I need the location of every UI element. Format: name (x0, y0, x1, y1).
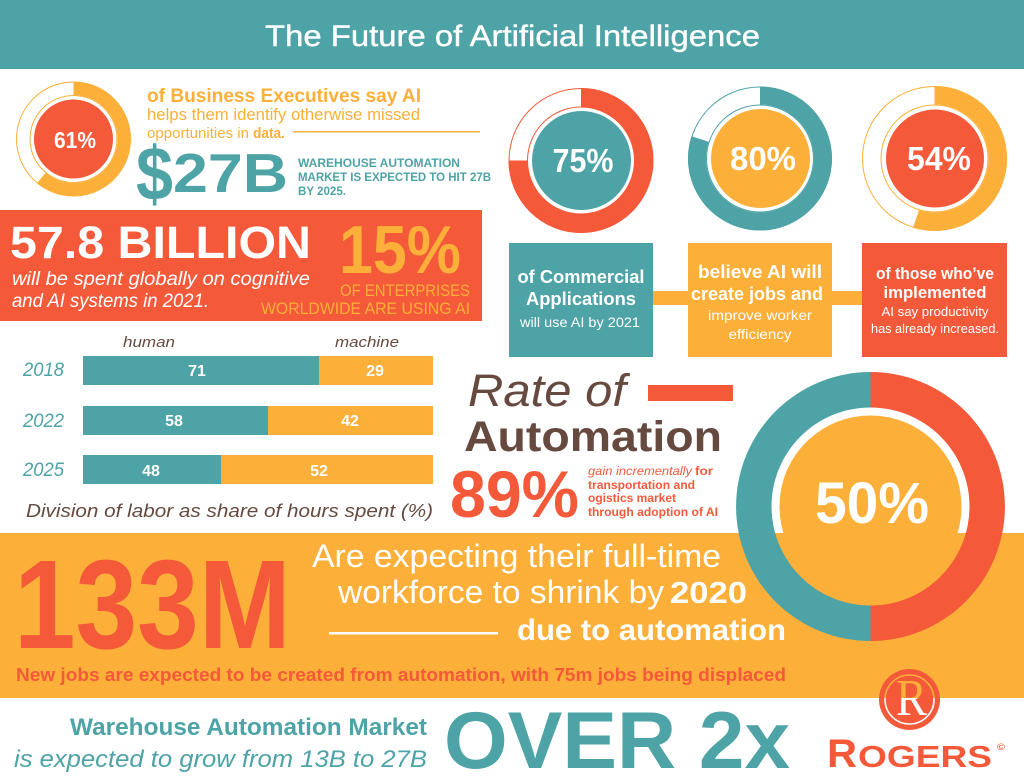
bar row: 2022: 42 (341, 413, 359, 430)
panel: create jobs: believe AI will (698, 262, 822, 282)
stat: 89%: 89% (450, 457, 579, 531)
panel: commercial applications: of Commercial (518, 267, 644, 287)
text: warehouse automation market growth (14, 714, 427, 773)
panel: create jobs: efficiency (728, 326, 792, 342)
panel: commercial applications (509, 243, 653, 357)
text: business executives: of Business Executives say AI (147, 86, 421, 107)
panel: productivity: implemented (884, 284, 986, 302)
panel: create jobs: create jobs and (691, 284, 823, 304)
legend labels (123, 334, 399, 351)
bar row: 2025: 52 (310, 463, 328, 480)
donut chart: 54% (862, 86, 1007, 231)
legend labels: human (123, 334, 175, 351)
bar row: 2018: 71 (188, 363, 206, 380)
text: business executives: opportunities in (147, 125, 249, 142)
text: enterprises using AI: OF ENTERPRISES (340, 281, 470, 300)
bar row: 2022: 2022 (22, 411, 64, 432)
donut chart: 50% (736, 372, 1005, 641)
donut chart: 61% (16, 82, 131, 196)
bar row: 2022: 58 (165, 413, 183, 430)
logo: Rogers: R (827, 732, 857, 776)
text: warehouse automation market growth: is expected to grow from 13B to 27B (14, 746, 427, 773)
donut chart: 80%: 80% (730, 140, 796, 177)
text: workforce expectation: workforce to shrink by (337, 574, 664, 610)
text: warehouse automation market: MARKET IS EXPECTED TO HIT 27B (298, 172, 491, 184)
panel: spending and enterprises (0, 210, 482, 321)
bar row: 2022 (22, 406, 433, 435)
chart caption: Division of labor as share of hours spent (%) (26, 501, 433, 521)
panel: 133M workforce band (0, 533, 1024, 698)
title banner: The Future of Artificial Intelligence (265, 20, 760, 53)
bar row: 2025 (22, 455, 433, 484)
text: warehouse automation market: WAREHOUSE AUTOMATION (298, 158, 460, 170)
heading: rate of automation (464, 365, 733, 461)
stat: 57.8 billion: 57.8 BILLION (10, 217, 311, 268)
text: warehouse automation market growth: Warehouse Automation Market (70, 714, 427, 741)
text: warehouse automation market: BY 2025. (298, 186, 346, 198)
text: enterprises using AI (261, 281, 470, 318)
bar row: 2018 (22, 356, 433, 385)
bar row: 2018: 2018 (22, 360, 64, 381)
text: transportation and logistics: through adoption of AI (588, 505, 718, 519)
connector bars (653, 291, 862, 305)
donut chart: 80% (688, 86, 832, 230)
bar row: 2025: 2025 (22, 460, 64, 481)
stat: $27B (136, 132, 288, 217)
panel: create jobs: improve worker (708, 307, 812, 323)
donut chart: 61%: 61% (54, 127, 96, 153)
logo: Rogers (827, 669, 1005, 776)
text: enterprises using AI: WORLDWIDE ARE USING AI (261, 299, 470, 318)
panel: productivity: has already increased. (871, 322, 999, 336)
text: transportation and logistics: ogistics market (588, 491, 676, 505)
text: warehouse automation market (298, 158, 491, 198)
text: business executives: data. (253, 125, 285, 142)
donut chart: 75% (508, 88, 654, 233)
text: spending description (12, 269, 310, 312)
text: workforce expectation (312, 538, 786, 647)
text: workforce expectation: due to automation (517, 614, 786, 647)
bar row: 2025: 48 (142, 463, 160, 480)
text: transportation and logistics (588, 464, 718, 519)
text: workforce expectation: Are expecting their full-time (312, 538, 721, 574)
text: transportation and logistics: for (695, 464, 713, 478)
panel: productivity (862, 243, 1007, 357)
stat: 15%: 15% (339, 212, 461, 288)
logo: Rogers: R (896, 670, 927, 727)
text: transportation and logistics: gain incrementally (588, 464, 693, 478)
text: transportation and logistics: transportation and (588, 478, 695, 492)
bar row: 2018: 29 (366, 363, 384, 380)
donut chart: 50%: 50% (815, 471, 929, 536)
text: workforce expectation: 2020 (670, 575, 747, 610)
text: business executives: helps them identify otherwise missed (147, 105, 420, 124)
panel: productivity: AI say productivity (882, 305, 989, 319)
stat: 133M: 133M (14, 534, 291, 675)
text: business executives (147, 86, 480, 142)
panel: create jobs (688, 243, 832, 357)
text: spending description: will be spent globally on cognitive (12, 269, 310, 290)
heading: rate of automation: Automation (464, 413, 722, 461)
text: new jobs: New jobs are expected to be created from automation, with 75m jobs being displaced (16, 664, 786, 685)
heading: rate of automation: Rate of (468, 365, 631, 416)
stat: $27B: $ (136, 132, 173, 217)
logo: Rogers: OGERS (858, 739, 992, 774)
panel: commercial applications: Applications (526, 289, 636, 309)
legend labels: machine (335, 334, 399, 351)
title banner (0, 0, 1024, 69)
stat: $27B: 27B (173, 142, 288, 204)
donut chart: 54%: 54% (907, 140, 971, 177)
bar chart: division of labor (22, 334, 433, 521)
panel: productivity: of those who’ve (876, 265, 994, 283)
donut chart: 75%: 75% (552, 142, 614, 179)
text: spending description: and AI systems in 2021. (12, 291, 209, 312)
logo: Rogers: © (997, 742, 1005, 752)
panel: commercial applications: will use AI by 2021 (519, 315, 640, 330)
